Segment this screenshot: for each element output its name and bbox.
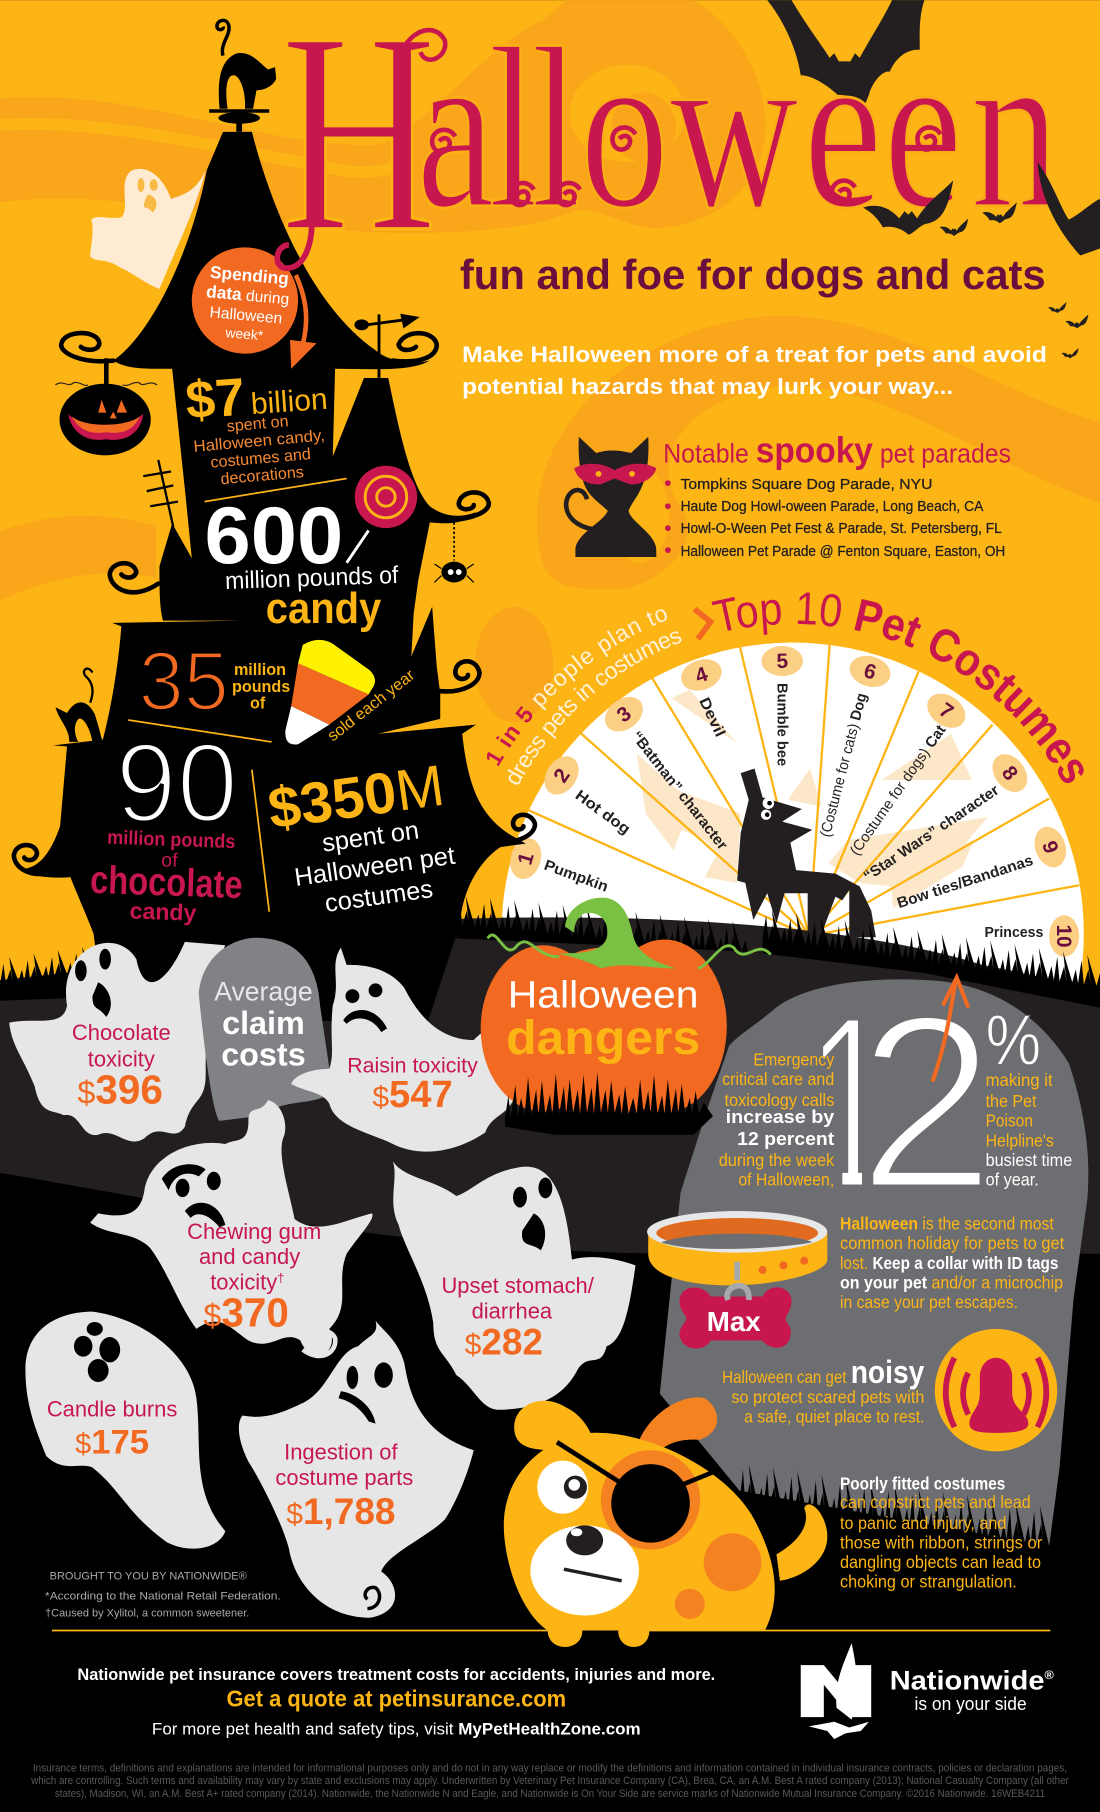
ghost face (138, 178, 158, 213)
title flourishes (277, 30, 941, 268)
roof curls (14, 333, 535, 874)
stat: 35 million pounds: million (234, 661, 286, 679)
panel: top 10 pet costumes wheel: 4 (692, 662, 711, 688)
title: Halloween (277, 0, 1060, 292)
title: Halloween: w (670, 0, 799, 256)
parades list (665, 477, 1005, 560)
text: noisy (722, 1354, 924, 1426)
ghost: chewing gum: and candy (199, 1244, 300, 1269)
parades list: Tompkins Square Dog Parade, NYU (681, 477, 932, 493)
tombstone: average claim costs (199, 938, 333, 1121)
text: noisy: a safe, quiet place to rest. (744, 1406, 924, 1426)
arrow and curl (277, 220, 317, 369)
spending data circle: week* (224, 324, 264, 343)
title: Halloween: a (416, 0, 495, 256)
costume labels: Bumble bee (774, 683, 791, 766)
stat: 12 percent: during the week (719, 1150, 835, 1170)
icon: jack-o-lantern (55, 358, 157, 455)
text: noisy: Halloween can get noisy (722, 1354, 924, 1390)
title: Halloween: e (803, 0, 882, 256)
stat: 350M: costumes (323, 875, 435, 918)
footer call to action: For more pet health and safety tips, visit MyPetHealthZone.com (152, 1719, 641, 1738)
icon: candy corn (285, 640, 375, 745)
panel grass (739, 1464, 1055, 1560)
stat: 90 million pounds chocolate: chocolate (89, 858, 243, 907)
intro text: potential hazards that may lurk your way... (462, 374, 953, 399)
credits and footnotes: BROUGHT TO YOU BY NATIONWIDE® (50, 1571, 247, 1583)
stat: 35 million pounds: pounds (232, 678, 290, 696)
icon: lollipop (355, 466, 417, 528)
footer call to action: Nationwide pet insurance covers treatment costs for accidents, injuries and more. (77, 1665, 715, 1684)
ghost: candle burns: $175 (75, 1424, 149, 1462)
stat: 12 percent: busiest time (986, 1150, 1072, 1170)
ghost: raisin toxicity: Raisin toxicity (347, 1053, 478, 1077)
tombstone: average claim costs: Average (214, 977, 313, 1007)
ghost: chewing gum: † (277, 1271, 284, 1286)
ghost: chocolate toxicity: toxicity (88, 1047, 155, 1072)
spending description: Halloween candy, (193, 426, 326, 456)
icon: cat on spire (209, 20, 276, 132)
credits and footnotes: †Caused by Xylitol, a common sweetener. (45, 1608, 249, 1620)
stat: 12 percent: increase by (726, 1106, 835, 1127)
background swirls (0, 0, 1100, 722)
stat: 600 million pounds: 600 (205, 491, 343, 581)
stat: 12 percent (719, 963, 1072, 1241)
stat: 90 million pounds chocolate: candy (129, 897, 197, 926)
ghost: chewing gum: toxicity (210, 1270, 277, 1295)
costume silhouettes (637, 690, 988, 908)
panel: haunted house (14, 20, 535, 1023)
panel: top 10 pet costumes wheel: 2 (549, 764, 575, 787)
panel: top 10 pet costumes wheel: 3 (613, 702, 636, 727)
parades list: Howl-O-Ween Pet Fest & Parade, St. Petersberg, FL (681, 521, 1002, 537)
ghost: ingestion of costume parts: $1,788 (286, 1491, 395, 1532)
number badges (506, 646, 1079, 957)
spending data circle (192, 247, 298, 354)
ghost: upset stomach: $282 (465, 1321, 543, 1362)
costume labels: Hot dog (572, 787, 633, 838)
stat: 35 million pounds: of (250, 694, 266, 712)
stat: 12 percent: Emergency (753, 1049, 835, 1069)
icon: dog with eye patch (504, 1397, 827, 1647)
spending description: costumes and (210, 445, 312, 472)
costume labels: Devil (695, 695, 728, 740)
left ear (514, 1401, 595, 1450)
costume labels (542, 683, 1043, 941)
stat: 90 million pounds chocolate: 90 (116, 721, 238, 846)
text: lost pets (840, 1214, 1064, 1312)
stat: 12 percent: 2 (857, 963, 996, 1241)
ghost: ingestion of costume parts: costume parts (275, 1465, 413, 1490)
stat: 12 percent: the Pet (986, 1091, 1037, 1111)
pumpkin stem (558, 898, 676, 968)
pumpkin grass (505, 1072, 713, 1135)
ghost: ingestion of costume parts (239, 1321, 474, 1618)
stat: 35 million pounds (139, 635, 290, 728)
chevron (694, 609, 711, 639)
Nationwide logo (801, 1643, 1054, 1739)
panel: top 10 pet costumes wheel: 5 (776, 650, 788, 673)
ghost: chocolate toxicity (9, 942, 225, 1142)
stat: 12 percent: Helpline's (986, 1130, 1054, 1150)
stat: 350M: spent on (320, 816, 421, 858)
tombstone: average claim costs: claim (222, 1005, 305, 1041)
costume labels: “Batman” character (628, 728, 731, 853)
stat: 12 percent: Poison (986, 1111, 1033, 1131)
ghost: chocolate toxicity: $396 (77, 1067, 163, 1113)
body (504, 1433, 775, 1647)
pumpkin: halloween dangers: dangers (506, 1011, 700, 1065)
costume labels: Princess (984, 924, 1043, 941)
title: Halloween: l (531, 0, 581, 256)
dividers (128, 720, 272, 912)
arc heading: 1 in 5: 1 in 5 people plan to (487, 609, 667, 766)
hill (0, 917, 1100, 1812)
text: poorly fitted costumes: choking or strangulation. (840, 1572, 1017, 1592)
text: lost pets: in case your pet escapes. (840, 1292, 1018, 1312)
costume labels: (Costume for dogs) Cat (847, 722, 949, 859)
text: poorly fitted costumes: those with ribbon, strings or (840, 1532, 1042, 1552)
stat: 600 million pounds: million pounds of (225, 562, 399, 595)
tail (776, 1504, 827, 1581)
icon: small cat (55, 669, 103, 742)
icon: spider (434, 522, 474, 582)
panel: top 10 pet costumes wheel: 10 (1052, 924, 1075, 948)
ghost: chewing gum: Chewing gum (187, 1219, 321, 1244)
stat: 12 percent: making it (986, 1070, 1053, 1090)
arc heading: 1 in 5: dress pets in costumes (507, 631, 682, 785)
panel: top 10 pet costumes wheel: 1 (514, 850, 539, 867)
ghost: upset stomach (393, 1161, 636, 1410)
credits and footnotes (45, 1571, 281, 1620)
pumpkin vines (488, 935, 771, 968)
panel: top 10 pet costumes wheel: 8 (997, 762, 1022, 785)
icon: alarm bell (935, 1329, 1057, 1451)
stat: 90 million pounds chocolate (89, 721, 244, 927)
text: lost pets: lost. Keep a collar with ID tags (840, 1253, 1058, 1273)
stat: 600 million pounds (205, 491, 399, 633)
text: lost pets: Halloween is the second most (840, 1214, 1054, 1234)
small bats (863, 162, 1100, 358)
panel: grey tombstone (660, 979, 1088, 1546)
parades list: Halloween Pet Parade @ Fenton Square, Easton, OH (681, 544, 1005, 560)
pumpkin: halloween dangers (481, 898, 771, 1135)
sold each year: sold each year (324, 666, 419, 745)
icon: antenna (143, 460, 178, 527)
title: Halloween: e (883, 0, 962, 256)
costume labels: Bow ties/Bandanas (895, 852, 1035, 912)
stat: 12 percent: of year. (986, 1170, 1039, 1190)
foreground black ground (0, 1173, 1100, 1812)
tombstone: average claim costs: costs (221, 1036, 306, 1072)
text: noisy: so protect scared pets with (731, 1387, 924, 1407)
intro text: Make Halloween more of a treat for pets and avoid (462, 342, 1047, 367)
subtitle: fun and foe for dogs and cats (460, 251, 1046, 298)
text: poorly fitted costumes: Poorly fitted costumes (840, 1474, 1005, 1494)
stat: 350M: Halloween pet (293, 842, 457, 892)
costume labels: (Costume for cats) Dog (817, 691, 871, 839)
footer divider (52, 1629, 1050, 1631)
stat: 350M: $350M (264, 754, 448, 842)
stat: 12 percent: 1 (805, 964, 895, 1241)
panel: top 10 pet costumes wheel: 6 (861, 659, 879, 685)
stat: 600 million pounds: candy (266, 584, 382, 633)
disclaimer (30, 1762, 1069, 1800)
spending data circle: Halloween (209, 304, 283, 327)
stat: 12 percent: toxicology calls (724, 1090, 835, 1110)
divider (205, 478, 347, 502)
icon: weather vane (356, 314, 416, 378)
stat: 90 million pounds chocolate: million pounds (107, 827, 236, 853)
panel: top 10 pet costumes wheel: 9 (1037, 838, 1063, 856)
ghost: upset stomach: diarrhea (472, 1299, 553, 1324)
stat: 12 percent: critical care and (722, 1069, 834, 1089)
ghost: upset stomach: Upset stomach/ (441, 1273, 595, 1298)
ghost: chewing gum (90, 1100, 373, 1356)
icon: masked black cat (566, 437, 656, 557)
Nationwide logo: Nationwide (890, 1665, 1031, 1695)
ghost: faded top (90, 169, 206, 289)
costume labels: “Star Wars” character (860, 782, 1002, 885)
ghost: ingestion of costume parts: Ingestion of (284, 1439, 398, 1464)
pumpkin: halloween dangers: Halloween (508, 974, 698, 1017)
icon: howling wolf (737, 768, 876, 937)
text: poorly fitted costumes: to panic and injury, and (840, 1513, 1006, 1533)
spending data circle: data during (205, 281, 290, 308)
panel: top 10 pet costumes wheel: 7 (935, 698, 957, 724)
title: Halloween: o (580, 0, 669, 256)
spending description: decorations (220, 463, 305, 488)
intro text (462, 342, 1047, 399)
stat: 12 percent: 12 percent (737, 1128, 834, 1149)
parades heading: Notable spooky pet parades (663, 430, 1011, 470)
icon: collar and bone tag: Max (707, 1306, 761, 1337)
arc heading: top 10 pet costumes: Top 10 Pet Costumes (712, 592, 1084, 784)
right ear (638, 1397, 717, 1458)
title: Halloween: n (971, 0, 1060, 256)
Nationwide logo: ® (1044, 1670, 1054, 1682)
ghost: raisin toxicity: $547 (372, 1073, 453, 1116)
text: poorly fitted costumes: dangling objects can lead to (840, 1552, 1041, 1572)
stat: 12 percent: of Halloween, (738, 1170, 834, 1190)
ghost: chocolate toxicity: Chocolate (72, 1020, 171, 1045)
stat: 7 billion: $7billion (184, 362, 329, 431)
orange arrow (932, 978, 968, 1082)
panel: top 10 pet costumes wheel (501, 643, 1084, 1225)
text: poorly fitted costumes: can constrict pets and lead (840, 1492, 1031, 1512)
stat: 12 percent: % (986, 1000, 1041, 1080)
stat: 350M (264, 753, 461, 924)
spending data circle: Spending (209, 262, 290, 289)
ghost: candle burns (25, 1312, 225, 1549)
stat: 90 million pounds chocolate: of (161, 849, 179, 872)
credits and footnotes: *According to the National Retail Federation. (45, 1590, 281, 1602)
stat: 35 million pounds: 35 (139, 635, 229, 728)
ghost: candle burns: Candle burns (47, 1397, 177, 1422)
spending description (191, 409, 329, 490)
grass (0, 896, 1100, 1008)
ghost: chewing gum: $370 (203, 1290, 289, 1336)
text: poorly fitted costumes (840, 1474, 1042, 1592)
ghost: raisin toxicity (291, 948, 514, 1152)
costume labels: Pumpkin (542, 857, 610, 896)
Nationwide logo: is on your side (915, 1693, 1027, 1714)
footer call to action: Get a quote at petinsurance.com (226, 1686, 566, 1712)
parades list: Haute Dog Howl-oween Parade, Long Beach, CA (681, 499, 984, 515)
title: Halloween: l (488, 0, 538, 256)
text: lost pets: on your pet and/or a microchip (840, 1272, 1063, 1292)
big bat (767, 0, 924, 109)
spending description: spent on (226, 412, 289, 436)
footer call to action (77, 1665, 715, 1738)
text: lost pets: common holiday for pets to get (840, 1233, 1064, 1253)
icon: collar and bone tag (647, 1211, 827, 1349)
